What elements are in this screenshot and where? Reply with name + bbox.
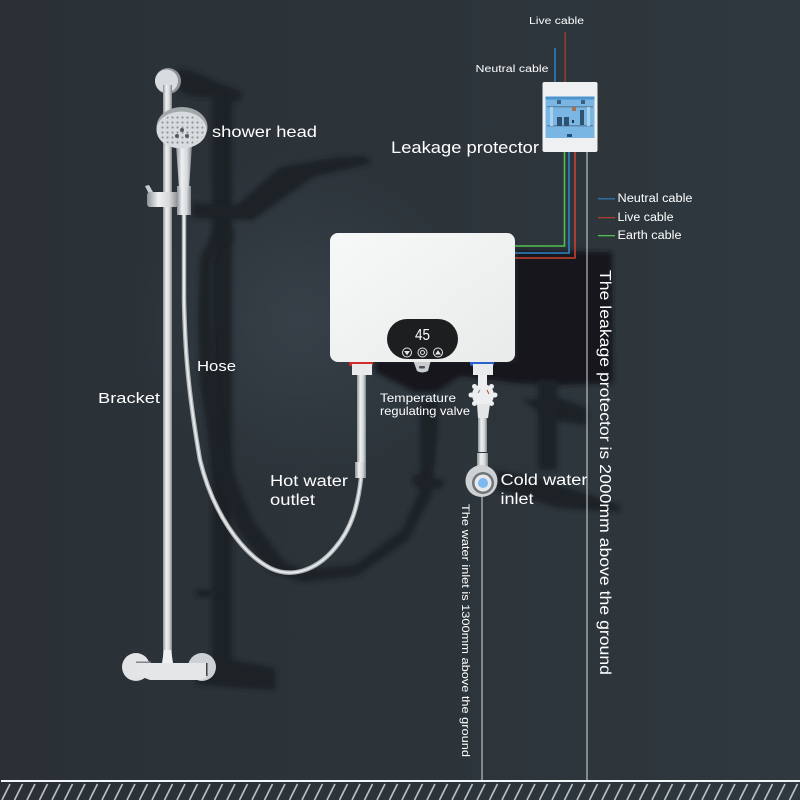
heater body xyxy=(330,233,515,362)
heater hot outlet connector xyxy=(349,360,373,375)
label: shower head: shower head xyxy=(212,124,317,141)
mixer valve xyxy=(122,650,216,681)
temperature regulating valve and cold water pipe xyxy=(468,375,498,471)
label: cold water inlet: Cold water xyxy=(500,472,588,489)
wall shadows xyxy=(178,68,620,690)
slider holder xyxy=(145,185,191,215)
legend: cable colours xyxy=(598,193,692,242)
cables to heater xyxy=(515,152,575,258)
label: bracket: Bracket xyxy=(98,390,161,407)
control buttons xyxy=(402,348,442,357)
display panel xyxy=(387,319,458,359)
shower head xyxy=(156,107,208,188)
legend: cable colours: Live cable xyxy=(618,212,674,224)
leakage protector box xyxy=(542,82,598,152)
shower rail bracket xyxy=(155,68,181,657)
label: water inlet height: The water inlet is 1300mm above the ground xyxy=(459,504,471,757)
label: hot water outlet: Hot water xyxy=(270,473,348,490)
label: leakage protector: Leakage protector xyxy=(391,138,539,157)
heater cold inlet connector xyxy=(470,360,494,375)
water heater xyxy=(330,233,515,375)
legend: cable colours: Neutral cable xyxy=(618,193,692,205)
legend: cable colours: Earth cable xyxy=(618,230,682,242)
measuring line: water inlet height xyxy=(482,495,483,780)
incoming neutral cable xyxy=(554,48,556,82)
label: hot water outlet: outlet xyxy=(270,492,316,509)
label: live cable top: Live cable xyxy=(529,16,585,27)
hot water pipe xyxy=(355,375,366,478)
cold water wall fitting xyxy=(466,465,498,497)
temperature readout: 45 xyxy=(415,327,430,344)
measuring line: leakage protector height xyxy=(586,152,588,780)
label: neutral cable top: Neutral cable xyxy=(476,64,549,75)
wall light xyxy=(130,150,470,490)
label: temperature regulating valve: regulating valve xyxy=(380,404,470,418)
mounting tab xyxy=(413,360,431,372)
hose xyxy=(184,215,361,573)
label: leakage protector height: The leakage protector is 2000mm above the ground xyxy=(596,270,613,675)
label: cold water inlet: inlet xyxy=(500,491,534,508)
incoming live cable xyxy=(564,32,566,82)
label: temperature regulating valve: Temperature xyxy=(380,391,456,405)
ground line with hatching xyxy=(1,780,800,800)
label: hose: Hose xyxy=(197,358,236,375)
